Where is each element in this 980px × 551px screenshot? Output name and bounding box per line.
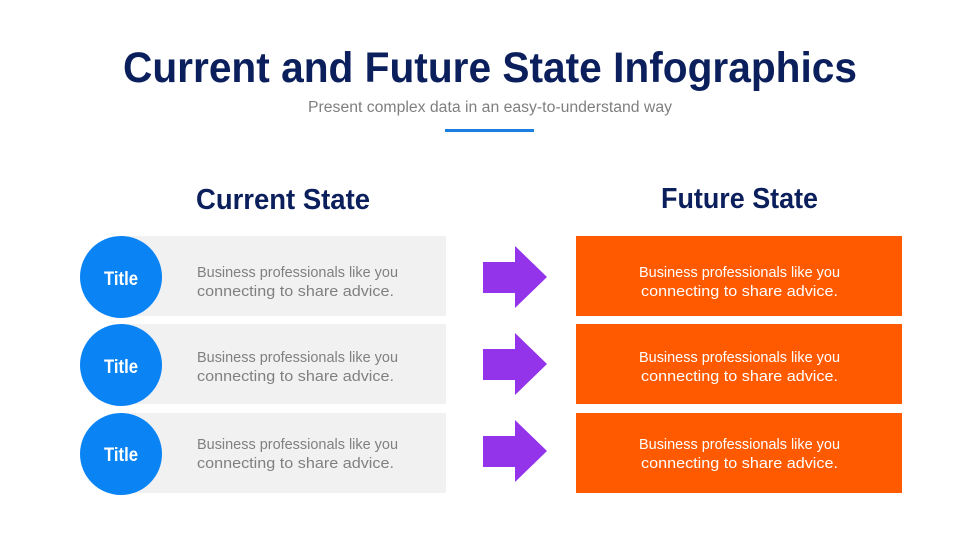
text: current 2: connecting to share advice.: [197, 368, 394, 385]
text: current 3: Business professionals like you: [197, 436, 398, 453]
badge: title 1: [80, 236, 162, 318]
label: title 1: Title: [104, 269, 138, 290]
panel: future 1: [576, 236, 902, 316]
heading: current state: Current State: [196, 184, 370, 216]
row 1: current state: [80, 236, 446, 318]
title underline: [445, 129, 534, 132]
panel: future 2: [576, 324, 902, 404]
text: current 2: Business professionals like you: [197, 349, 398, 366]
row 2: current state: [80, 324, 446, 406]
panel: future 1: connecting to share advice.: [641, 283, 838, 300]
panel: future 3: connecting to share advice.: [641, 455, 838, 472]
label: title 3: Title: [104, 445, 138, 466]
panel: current 3: [121, 413, 446, 493]
title: Current and Future State Infographics: [123, 45, 857, 92]
label: title 2: Title: [104, 357, 138, 378]
text: current 1: Business professionals like you: [197, 264, 398, 281]
subtitle: Present complex data in an easy-to-understand way: [308, 99, 672, 116]
heading: future state: Future State: [661, 183, 818, 215]
panel: future 2: connecting to share advice.: [641, 368, 838, 385]
badge: title 2: [80, 324, 162, 406]
arrow 3: [483, 420, 547, 482]
panel: future 3: Business professionals like you: [639, 436, 840, 453]
panel: current 2: [121, 324, 446, 404]
panel: future 1: Business professionals like you: [639, 264, 840, 281]
arrow 1: [483, 246, 547, 308]
arrow 2: [483, 333, 547, 395]
badge: title 3: [80, 413, 162, 495]
panel: current 1: [121, 236, 446, 316]
text: current 1: connecting to share advice.: [197, 283, 394, 300]
panel: future 3: [576, 413, 902, 493]
row 3: current state: [80, 413, 446, 495]
panel: future 2: Business professionals like you: [639, 349, 840, 366]
text: current 3: connecting to share advice.: [197, 455, 394, 472]
